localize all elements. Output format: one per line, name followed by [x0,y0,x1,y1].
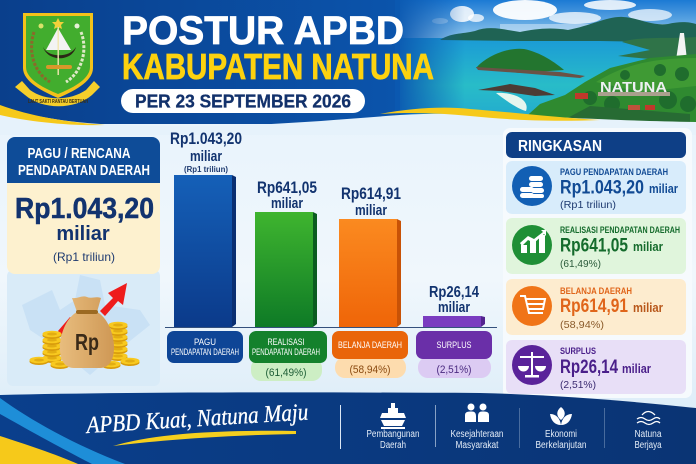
label: realisasi with percentage: (61,49%) [266,367,306,379]
bar: realisasi [255,178,317,327]
bar: pagu: (Rp1 triliun) [184,165,228,174]
label: surplus with percentage: (2,51%) [436,364,472,376]
divider lines [340,405,605,449]
row: belanja: BELANJA DAERAH [560,286,632,296]
row: surplus [506,340,686,394]
icon: money bag [60,296,114,368]
label: surplus with percentage [416,331,492,378]
label: belanja with percentage: (58,94%) [350,364,390,376]
pagu value card: Rp1.043,20 [15,193,154,225]
header banner [0,0,696,124]
row: surplus: Rp26,14 [560,357,618,378]
bar: pagu: miliar [190,148,222,165]
bar: realisasi: Rp641,05 [257,178,317,197]
icon: waves [637,412,660,424]
title: POSTUR APBD [122,9,404,53]
bar: surplus [423,284,485,327]
pillar: natuna berjaya [634,412,662,451]
row: realisasi: miliar [633,239,663,254]
label: belanja with percentage [332,331,408,378]
icon: leaves [550,407,572,425]
emblem: Kabupaten Natuna shield [15,13,100,106]
row: surplus: SURPLUS [560,346,596,356]
emblem: Kabupaten Natuna shield: LAUT SAKTI RANTAU BERTUAH [28,99,88,105]
pagu value card [7,183,160,274]
icon: shopping cart [520,296,545,313]
landmark: NATUNA: NATUNA [600,79,667,96]
row: surplus: miliar [622,361,651,376]
panel heading: PAGU / RENCANA [28,145,131,162]
label: realisasi with percentage: PENDAPATAN DAERAH [252,347,320,357]
row: realisasi: (61,49%) [560,258,601,270]
pillar: kesejahteraan masyarakat [450,404,504,451]
label: realisasi with percentage: REALISASI [268,337,304,347]
icon: people [465,404,489,422]
title: KABUPATEN NATUNA [122,46,434,87]
panel: pagu / rencana [7,137,160,386]
row: realisasi: Rp641,05 [560,236,628,256]
landscape photo: Natuna islands [400,0,696,124]
icon: growth chart [520,230,546,253]
title [122,9,434,87]
label: pagu: PENDAPATAN DAERAH [171,347,239,357]
row: pagu: Rp1.043,20 [560,178,644,198]
pillar: ekonomi berkelanjutan: Berkelanjutan [536,440,586,451]
bar: surplus: miliar [438,299,470,316]
label: pagu: PAGU [194,337,216,347]
row: pagu: miliar [649,181,678,196]
row: pagu: PAGU PENDAPATAN DAERAH [560,167,668,177]
axis line [165,327,497,328]
row: belanja [506,279,686,335]
bar: belanja [339,184,401,327]
pillar: natuna berjaya: Berjaya [634,440,662,451]
row: pagu: (Rp1 triliun) [560,199,616,211]
bar: belanja: Rp614,91 [341,184,401,203]
row: belanja: miliar [633,300,663,315]
label: belanja with percentage: BELANJA DAERAH [338,340,402,350]
bar: belanja: miliar [355,202,387,219]
row: belanja: (58,94%) [560,319,604,331]
bar: realisasi: miliar [271,195,303,212]
ringkasan heading: RINGKASAN [518,138,602,155]
pagu value card: (Rp1 triliun) [53,250,115,264]
label: surplus with percentage: SURPLUS [436,340,472,350]
icon: coin stacks [30,322,140,369]
pagu value card: miliar [56,223,110,245]
label: pagu [167,331,243,363]
ringkasan heading [506,132,686,158]
icon: ship [380,403,406,429]
panel heading: PENDAPATAN DAERAH [18,162,150,179]
bar: pagu [170,129,242,327]
bar: pagu: Rp1.043,20 [170,129,242,148]
lighthouse [676,33,687,60]
pillar: pembangunan daerah [366,403,420,451]
row: surplus: (2,51%) [560,379,596,391]
map background [7,270,160,386]
pillar: pembangunan daerah: Daerah [380,440,406,451]
bar: surplus: Rp26,14 [429,284,479,301]
icon: money bag: Rp [75,329,99,355]
pillar: kesejahteraan masyarakat: Masyarakat [456,440,499,451]
pillar: ekonomi berkelanjutan: Ekonomi [545,429,577,440]
row: belanja: Rp614,91 [560,296,628,317]
pillar: pembangunan daerah: Pembangunan [366,429,420,440]
pillar: ekonomi berkelanjutan [536,407,586,451]
pillar: natuna berjaya: Natuna [634,429,662,440]
row: realisasi [506,218,686,274]
panel: ringkasan [503,128,692,398]
footer band [0,392,696,464]
pillar: kesejahteraan masyarakat: Kesejahteraan [450,429,504,440]
label: realisasi with percentage [249,331,327,381]
icon: coins [520,176,544,198]
slogan: APBD Kuat, Natuna Maju [84,399,309,439]
icon: scales [518,352,546,378]
icon: red growth arrow [58,283,127,335]
date pill: PER 23 SEPTEMBER 2026 [135,92,351,112]
row: pagu [506,161,686,214]
panel heading [7,137,160,183]
bar chart [165,129,497,381]
body background curve and gold swooshes [0,105,696,135]
